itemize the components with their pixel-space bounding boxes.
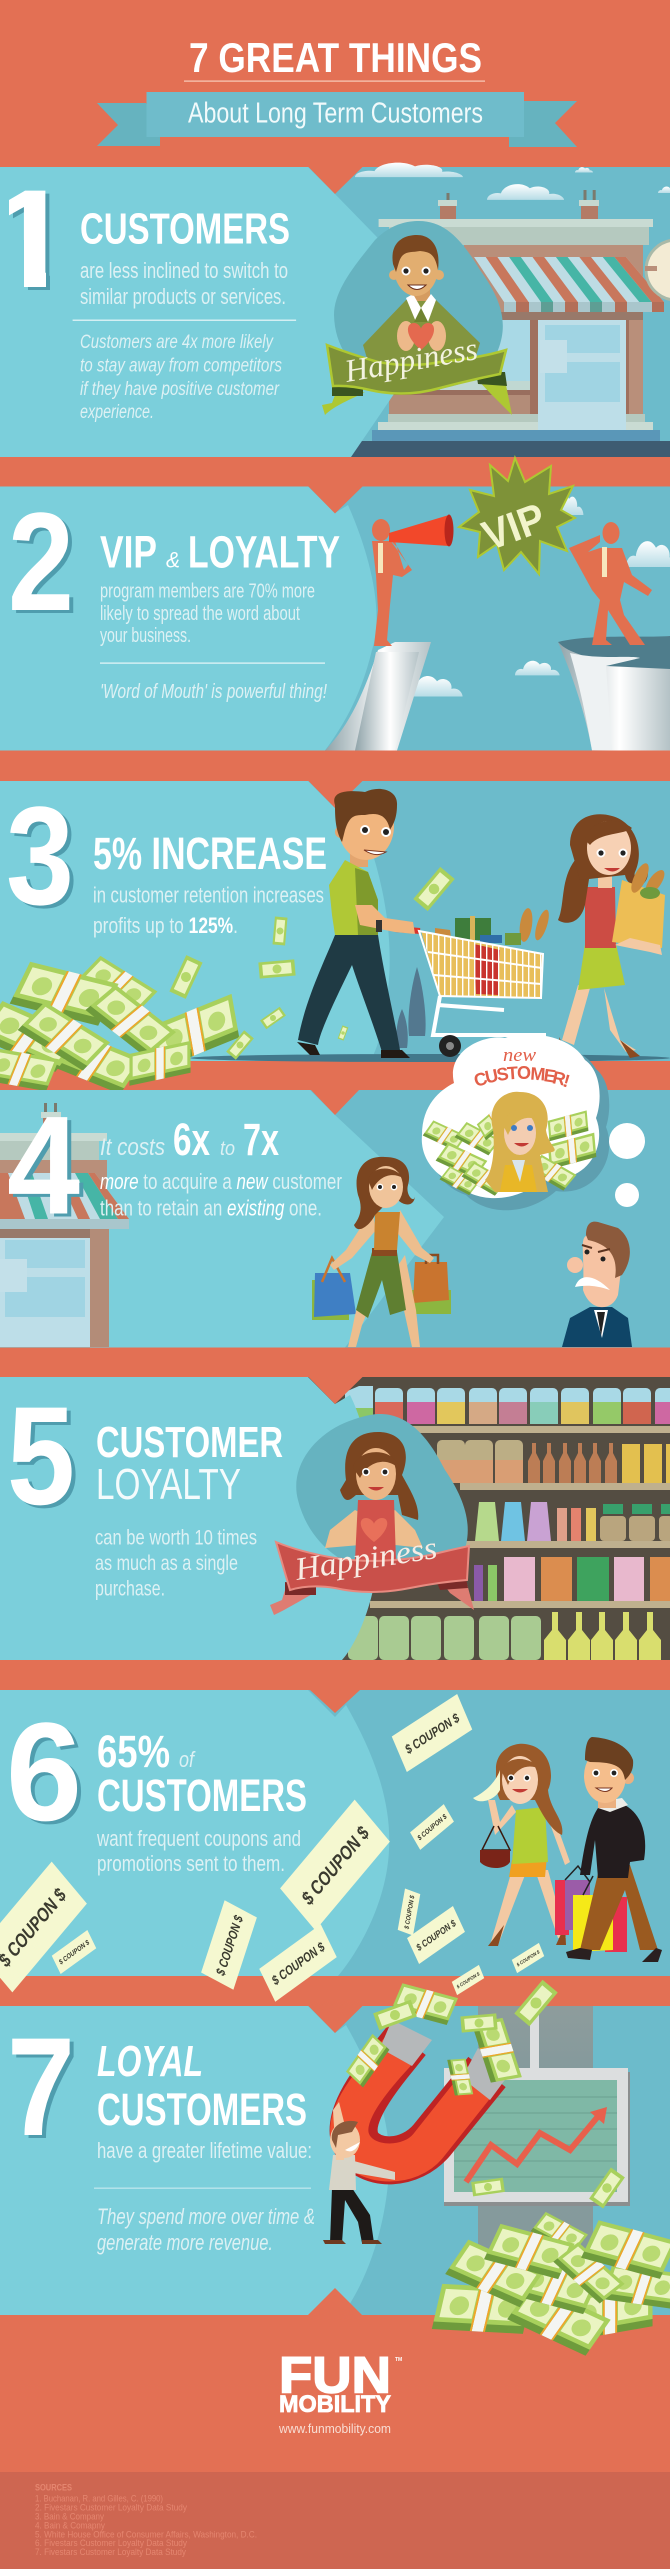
figure: listening man [569, 522, 652, 645]
notch [308, 167, 362, 194]
light text panel [0, 781, 390, 1061]
coupons: $ COUPON $ [403, 1709, 462, 1757]
footer notch [308, 2288, 362, 2315]
blob behind woman [296, 1414, 468, 1575]
logo: TM [395, 2357, 402, 2363]
thought dots [609, 1123, 645, 1207]
italic note: 'Word of Mouth' is powerful thing! [100, 681, 327, 703]
heading: CUSTOMERS [97, 2084, 307, 2135]
chart billboard [444, 2006, 630, 2315]
jar row [345, 1386, 670, 1424]
money pile [432, 2212, 670, 2356]
title: 7 GREAT THINGS [189, 34, 482, 81]
heading: 65% [97, 1726, 170, 1777]
new customer caption [472, 1045, 572, 1091]
body text: more to acquire a new customer [100, 1169, 342, 1194]
VIP starburst: VIP [476, 494, 551, 559]
heading: LOYAL [97, 2037, 203, 2086]
logo: MOBILITY [279, 2391, 391, 2418]
body text: your business. [100, 625, 191, 647]
coupons: $ COUPON $ [58, 1939, 91, 1967]
magnet [349, 2020, 510, 2162]
body text: program members are 70% more [100, 580, 315, 602]
italic note: experience. [80, 401, 154, 423]
header [97, 34, 577, 147]
heading [100, 526, 340, 578]
panel: section 2 VIP and loyalty [0, 458, 670, 750]
heading: VIP [100, 526, 157, 578]
number 6: 6 [6, 1693, 82, 1850]
notch [308, 781, 362, 808]
box row [474, 1557, 670, 1601]
number 2: 2 [8, 483, 74, 640]
coupons: $ COUPON $ [299, 1822, 373, 1910]
number 4: 4 [7, 1086, 80, 1244]
money pile [0, 956, 239, 1094]
italic note: if they have positive customer [80, 378, 280, 400]
logo [279, 2346, 402, 2418]
notch [310, 1690, 360, 1713]
number 5: 5 [7, 1377, 75, 1534]
light text panel [0, 1090, 444, 1348]
body text: than to retain an existing one. [100, 1196, 322, 1220]
blonde woman [485, 1092, 555, 1192]
body text: have a greater lifetime value: [97, 2138, 312, 2163]
notch [308, 2006, 362, 2033]
body text [100, 1169, 342, 1220]
bottom row [348, 1612, 661, 1660]
sources band: 5. White House Office of Consumer Affairs, Washington, D.C. [35, 2529, 257, 2540]
man [566, 1737, 662, 1962]
panel: section 7 loyal customers [0, 1980, 670, 2356]
coupons: $ COUPON $ [213, 1912, 246, 1978]
heading [96, 1418, 283, 1509]
body text: as much as a single [95, 1552, 238, 1575]
italic note: generate more revenue. [97, 2230, 273, 2255]
flying bills [169, 867, 455, 1060]
heading [100, 1114, 279, 1165]
body text: likely to spread the word about [100, 603, 300, 625]
heading: LOYALTY [96, 1460, 241, 1509]
heading [97, 1726, 307, 1821]
woman [473, 1744, 570, 1946]
body text: in customer retention increases [93, 882, 324, 908]
body text [93, 882, 324, 938]
number 7: 7 [7, 2008, 75, 2165]
light text panel [0, 2006, 389, 2315]
italic note [80, 331, 282, 423]
panel: section 6 coupons [0, 1690, 670, 2002]
number 3: 3 [6, 777, 74, 934]
shopping cart [395, 907, 552, 1057]
heading: of [179, 1747, 196, 1772]
shopping bags [555, 1866, 627, 1952]
flying money [346, 1980, 625, 2208]
light text panel [0, 1377, 378, 1660]
awning [464, 257, 664, 320]
bottle row [437, 1440, 670, 1483]
happiness ribbon red: Happiness [291, 1529, 439, 1587]
tube row [475, 1502, 670, 1541]
italic note: Customers are 4x more likely [80, 331, 274, 353]
body text [95, 1526, 257, 1600]
coupons: $ COUPON $ [415, 1917, 458, 1954]
heading: to [220, 1138, 235, 1160]
happiness ribbon red [270, 1529, 474, 1615]
panel: section 1 customers [0, 160, 670, 457]
light text panel [0, 486, 377, 750]
shopping woman [312, 1157, 451, 1347]
thought bubble [422, 1034, 609, 1210]
body text: promotions sent to them. [97, 1851, 285, 1876]
heading: CUSTOMER [96, 1418, 283, 1467]
heading: 6x [173, 1114, 210, 1165]
coupons: $ COUPON $ [270, 1938, 327, 1989]
heading [97, 2037, 307, 2135]
couple shopping [473, 1737, 662, 1962]
body text: purchase. [95, 1578, 165, 1600]
notch [308, 1377, 362, 1404]
body text [80, 258, 288, 309]
heading: LOYALTY [188, 526, 340, 578]
sources band [0, 2472, 670, 2569]
body text: profits up to 125%. [93, 913, 238, 938]
new customer caption: new [503, 1045, 536, 1066]
italic note: to stay away from competitors [80, 354, 282, 376]
sources band: 1. Buchanan, R. and Gilles, C. (1990) [35, 2493, 163, 2504]
sources band: 3. Bain & Company [35, 2511, 104, 2522]
heading: 5% INCREASE [93, 828, 327, 879]
clouds [355, 163, 670, 200]
blob behind man [334, 221, 503, 390]
cliffs [325, 636, 670, 750]
happiness ribbon green: Happiness [341, 330, 480, 389]
body text: can be worth 10 times [95, 1526, 257, 1550]
body text [100, 580, 315, 647]
sources band: 4. Bain & Comapny [35, 2520, 105, 2531]
happiness ribbon green [322, 330, 512, 415]
notch [311, 1090, 359, 1115]
body text [96, 1826, 301, 1876]
trend arrow [466, 2107, 607, 2182]
new customer caption: CUSTOMER! [472, 1063, 572, 1091]
body text: similar products or services. [80, 284, 286, 309]
heading: It costs [100, 1134, 165, 1161]
heading: CUSTOMERS [80, 204, 290, 254]
figure: shouting man [372, 519, 412, 646]
VIP starburst [459, 458, 575, 574]
coupons: $ COUPON $ [404, 1894, 416, 1930]
sources band: 6. Fivestars Customer Loyalty Data Study [35, 2538, 187, 2549]
woman with grocery bag [558, 814, 668, 1058]
illustration: happy man [363, 235, 480, 375]
logo: FUN [279, 2346, 391, 2404]
angry man [562, 1222, 632, 1347]
storefront edge [0, 1103, 129, 1347]
trees [396, 967, 426, 1048]
coupons [0, 1694, 544, 2002]
body text: are less inclined to switch to [80, 258, 288, 283]
clouds [405, 493, 670, 696]
panel: section 5 customer loyalty [0, 1377, 670, 1660]
man pushing cart [297, 789, 415, 1058]
sources band: SOURCES [35, 2483, 72, 2494]
italic note [97, 2204, 315, 2255]
panel: section 4 cost to acquire [0, 1034, 670, 1348]
subtitle ribbon: About Long Term Customers [188, 98, 483, 130]
italic note: They spend more over time & [97, 2204, 315, 2229]
coupons: $ COUPON $ [417, 1813, 448, 1843]
body text: want frequent coupons and [96, 1826, 301, 1851]
man holding magnet [323, 2102, 395, 2244]
heading: 7x [243, 1114, 279, 1165]
illustration: happy woman [325, 1432, 423, 1560]
panel: section 3 5% increase [0, 777, 670, 1094]
light text panel [0, 1690, 389, 1976]
ground shadow [190, 1054, 670, 1062]
subtitle ribbon [97, 92, 577, 147]
light text panel [0, 167, 450, 457]
shelves with products [340, 1386, 670, 1660]
sources band: 2. Fivestars Customer Loyalty Data Study [35, 2502, 187, 2513]
coupons: $ COUPON $ [456, 1971, 481, 1991]
coupons: $ COUPON $ [516, 1949, 541, 1969]
megaphone [389, 514, 454, 546]
illustration: storefront [350, 190, 670, 457]
heading: & [166, 548, 180, 572]
website: www.funmobility.com [278, 2421, 391, 2436]
sources band: 7. Fivestars Customer Loyalty Data Study [35, 2547, 186, 2558]
notch [308, 486, 362, 514]
heading: CUSTOMERS [97, 1770, 307, 1821]
